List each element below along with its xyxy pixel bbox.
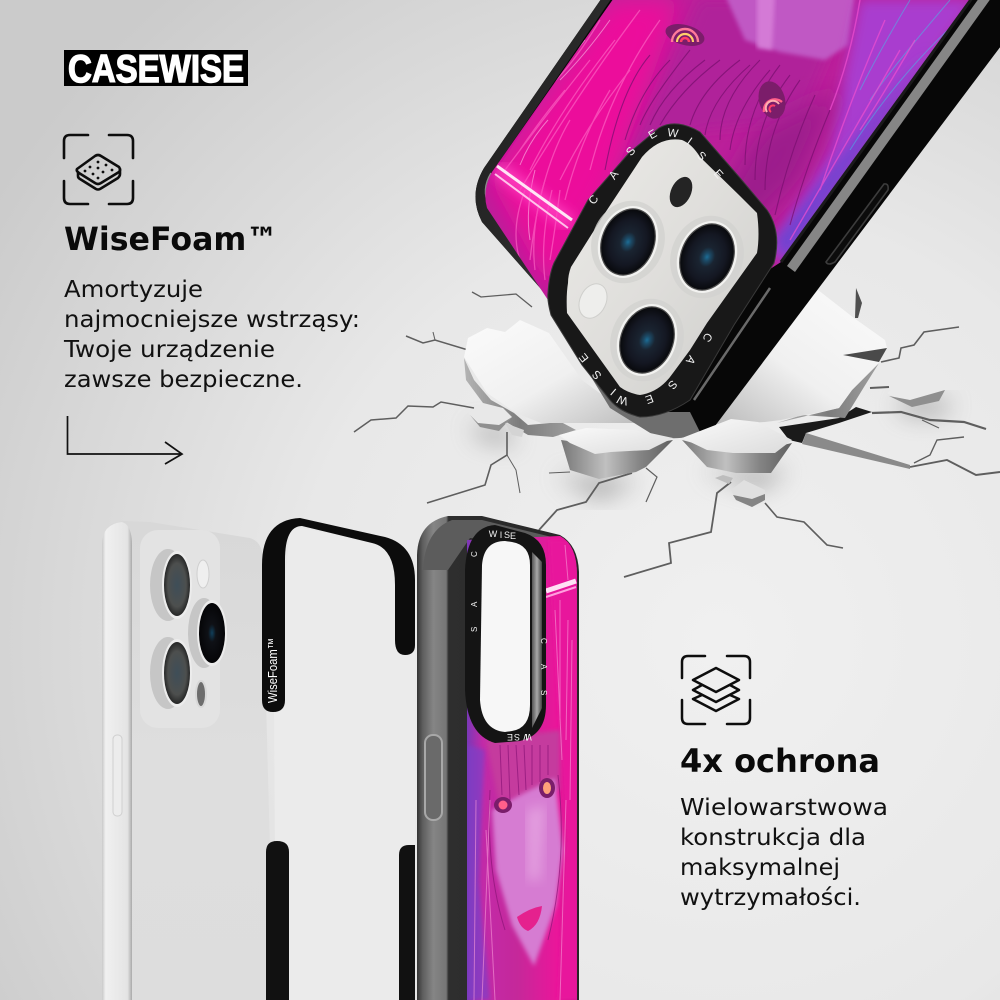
icon: foam pad in viewfinder [64, 135, 133, 204]
foam lower right strip [399, 845, 415, 1000]
camera ring [465, 525, 546, 743]
foam lower left strip [266, 841, 289, 1000]
WiseFoam frame insert [262, 518, 415, 1000]
camera island ring [548, 124, 777, 417]
rear lens 2 [188, 598, 227, 668]
text block: 4x ochrona description [680, 795, 888, 911]
phone case: tilted top, back view [470, 0, 1000, 438]
case body [417, 516, 579, 1000]
side button [425, 735, 442, 820]
crack lines [354, 292, 1000, 577]
plate A [559, 428, 673, 479]
rear side button [113, 735, 122, 816]
pink artwork [467, 530, 579, 1000]
ring text bottom: CASEWISE [577, 330, 714, 407]
rear lens 3 [150, 637, 192, 709]
phone case: side view [417, 516, 579, 1000]
camera plateau [140, 530, 220, 728]
hair strands [505, 10, 660, 280]
fringe strands [489, 745, 561, 940]
neon bar [497, 168, 571, 224]
eyes [666, 24, 786, 119]
crack wedge right [802, 433, 910, 469]
foam upper band [262, 518, 415, 712]
ring text right: CAS [539, 638, 548, 695]
ring text bottom: WISE [507, 732, 532, 742]
arrow [68, 416, 182, 464]
lens 2 [658, 205, 756, 309]
text block: 4x ochrona description: maksymalnej [680, 855, 840, 881]
left plate [464, 320, 640, 437]
face [492, 778, 563, 966]
logo: CASEWISE: CASEWISE [68, 48, 244, 91]
rear flash [197, 560, 209, 588]
ring text top: CASEWISE [587, 127, 725, 207]
camera ring opening [480, 541, 530, 732]
lens 3 [598, 288, 696, 392]
ground plates in front of the phone [559, 419, 792, 479]
fringe [486, 730, 560, 800]
text block: WiseFoam description: Amortyzuje [64, 277, 203, 303]
flash [574, 279, 612, 323]
sensor [665, 173, 697, 211]
shadows around impact [470, 400, 950, 500]
text block: WiseFoam description [63, 277, 360, 393]
lens 1 [579, 190, 677, 294]
foam sheet [274, 526, 415, 1000]
side button [826, 184, 888, 264]
lips [517, 906, 542, 931]
case body [475, 0, 1000, 436]
ring metal edge [532, 552, 542, 728]
heading: WiseFoam: WiseFoam™ [64, 220, 278, 258]
side frame [102, 522, 132, 1000]
pink artwork [485, 0, 969, 300]
plate B [682, 419, 792, 473]
white iPhone, back view [102, 521, 274, 1000]
ring text left: CAS [470, 551, 479, 632]
top surface [423, 520, 568, 570]
ring text top: WISE [489, 529, 516, 541]
text block: WiseFoam description: Twoje urządzenie [63, 337, 275, 363]
right plate [700, 288, 887, 425]
translucent rim [475, 0, 616, 356]
text block: 4x ochrona description: wytrzymałości. [680, 885, 861, 911]
camera island surface [567, 139, 758, 395]
text block: 4x ochrona description: Wielowarstwowa [680, 795, 888, 821]
text block: 4x ochrona description: konstrukcja dla [680, 825, 866, 851]
heading: 4x ochrona: 4x ochrona [680, 742, 880, 780]
rear lens 1 [150, 549, 192, 621]
dark line + grey glossy stripe [781, 0, 975, 262]
rear mic [196, 681, 206, 707]
eyes [494, 797, 512, 813]
text block: WiseFoam description: najmocniejsze wstrząsy: [64, 307, 360, 333]
rock chips [468, 377, 945, 507]
cracked ground [354, 288, 1000, 577]
neon bar [546, 581, 576, 591]
dark fissure [779, 407, 872, 443]
icon: layers in viewfinder [682, 656, 750, 724]
foam label: WiseFoam™ [265, 638, 280, 703]
text block: WiseFoam description: zawsze bezpieczne. [64, 367, 303, 393]
